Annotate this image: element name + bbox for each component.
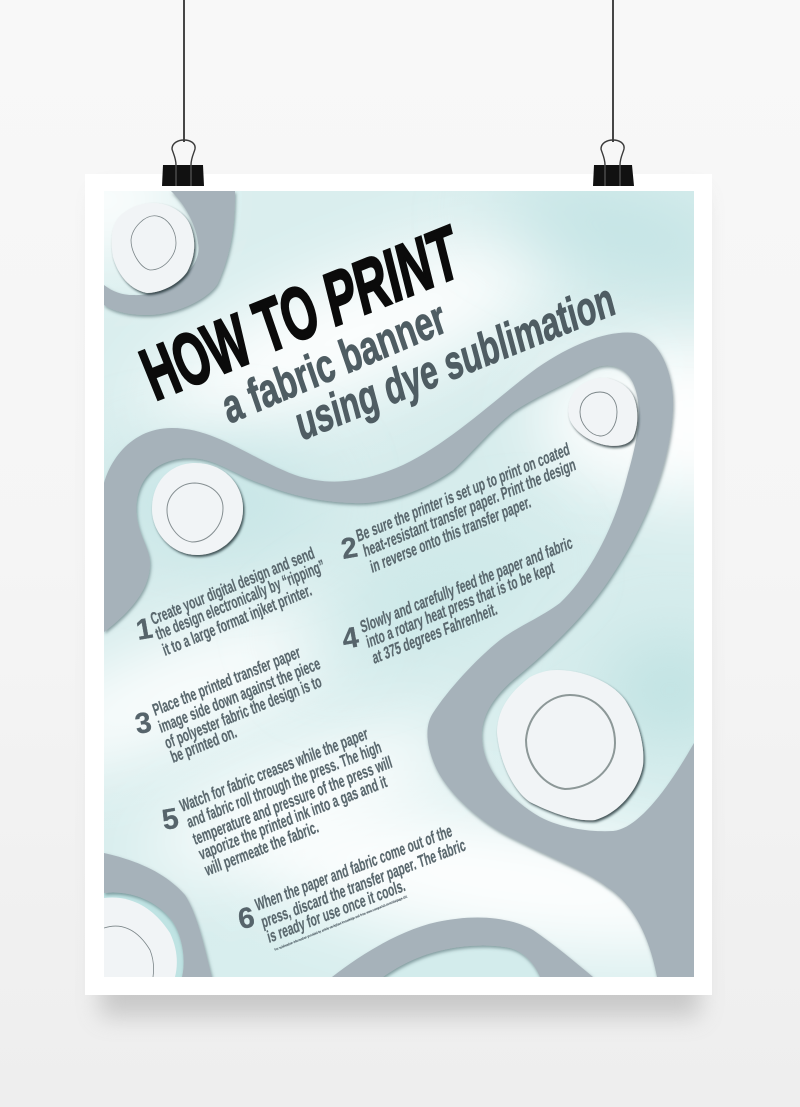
title bbox=[130, 209, 467, 416]
step 1 text bbox=[148, 543, 327, 660]
step 5 text: temperature and pressure of the press will bbox=[190, 753, 394, 849]
binder clip right bbox=[593, 140, 634, 186]
step 3 text: be printed on. bbox=[168, 723, 239, 767]
step 5 text bbox=[177, 724, 394, 880]
step 6 text: press, discard the transfer paper. The fabric bbox=[259, 835, 468, 932]
step 3 text bbox=[150, 643, 324, 767]
source credit: For sublimation information provided by article workplace knowledge and from www.compuclub.com/site/page-101 bbox=[274, 895, 408, 952]
step 6 text: When the paper and fabric come out of the bbox=[253, 821, 454, 915]
step 4 number: 4 bbox=[340, 622, 361, 656]
step 1 number: 1 bbox=[134, 613, 155, 647]
subtitle line 1: a fabric banner bbox=[215, 290, 452, 433]
title: PRINT bbox=[317, 209, 467, 343]
step 1 text: the design electronically by “ripping” bbox=[153, 556, 327, 644]
step 5 text: and fabric roll through the press. The high bbox=[184, 737, 384, 832]
hanging strings bbox=[184, 0, 613, 142]
step 6 text: is ready for use once it cools. bbox=[265, 876, 407, 947]
step 4 text: at 375 degrees Fahrenheit. bbox=[370, 599, 499, 668]
step 2 text: in reverse onto this transfer paper. bbox=[368, 492, 533, 577]
title: HOW bbox=[130, 298, 262, 416]
step 5 bbox=[160, 724, 394, 880]
artwork gradient background bbox=[104, 191, 694, 977]
step 6 bbox=[236, 821, 468, 947]
step 5 text: vaporize the printed ink into a gas and it bbox=[196, 772, 389, 864]
step 2 number: 2 bbox=[339, 532, 360, 566]
step 3 bbox=[133, 643, 324, 767]
step 1 text: it to a large format injket printer. bbox=[160, 581, 314, 660]
step 4 text bbox=[358, 533, 574, 668]
step 4 bbox=[340, 533, 574, 668]
step 4 text: into a rotary heat press that is to be kept bbox=[364, 558, 556, 652]
bottom-left gray blob bbox=[104, 853, 212, 977]
bottom teal pocket bbox=[398, 946, 540, 977]
plate: large lower right bbox=[497, 670, 643, 820]
plate: middle left bbox=[152, 463, 243, 555]
binder clip left bbox=[162, 140, 204, 186]
plate: top left bbox=[112, 203, 194, 293]
subtitle line 2: using dye sublimation bbox=[290, 272, 620, 451]
title: TO bbox=[244, 267, 329, 369]
step 1 bbox=[134, 543, 327, 660]
poster drop shadow bbox=[100, 195, 700, 1017]
bottom gray arch bbox=[332, 917, 593, 977]
step 6 number: 6 bbox=[236, 902, 257, 936]
step 2 bbox=[339, 439, 578, 577]
step 2 text: heat-resistant transfer paper. Print the design bbox=[361, 455, 578, 561]
step 3 text: image side down against the piece bbox=[156, 654, 323, 737]
bottom-left teal pocket bbox=[104, 892, 184, 977]
step 4 text: Slowly and carefully feed the paper and fabric bbox=[358, 533, 574, 637]
step 3 text: of polyester fabric the design is to bbox=[162, 672, 324, 753]
step 5 text: Watch for fabric creases while the paper bbox=[177, 724, 370, 816]
plate: top right bbox=[568, 378, 637, 446]
step 5 text: will permeate the fabric. bbox=[202, 817, 321, 880]
poster white sheet bbox=[85, 174, 712, 995]
step 5 number: 5 bbox=[160, 803, 181, 837]
central winding gray band bbox=[104, 333, 694, 977]
step 3 text: Place the printed transfer paper bbox=[150, 643, 303, 720]
step 1 text: Create your digital design and send bbox=[148, 543, 317, 629]
plate: bottom left bbox=[104, 897, 177, 977]
poster artwork bbox=[104, 191, 694, 977]
top-left gray blob bbox=[104, 191, 235, 315]
step 3 number: 3 bbox=[133, 707, 154, 741]
step 2 text: Be sure the printer is set up to print on coated bbox=[354, 439, 571, 546]
